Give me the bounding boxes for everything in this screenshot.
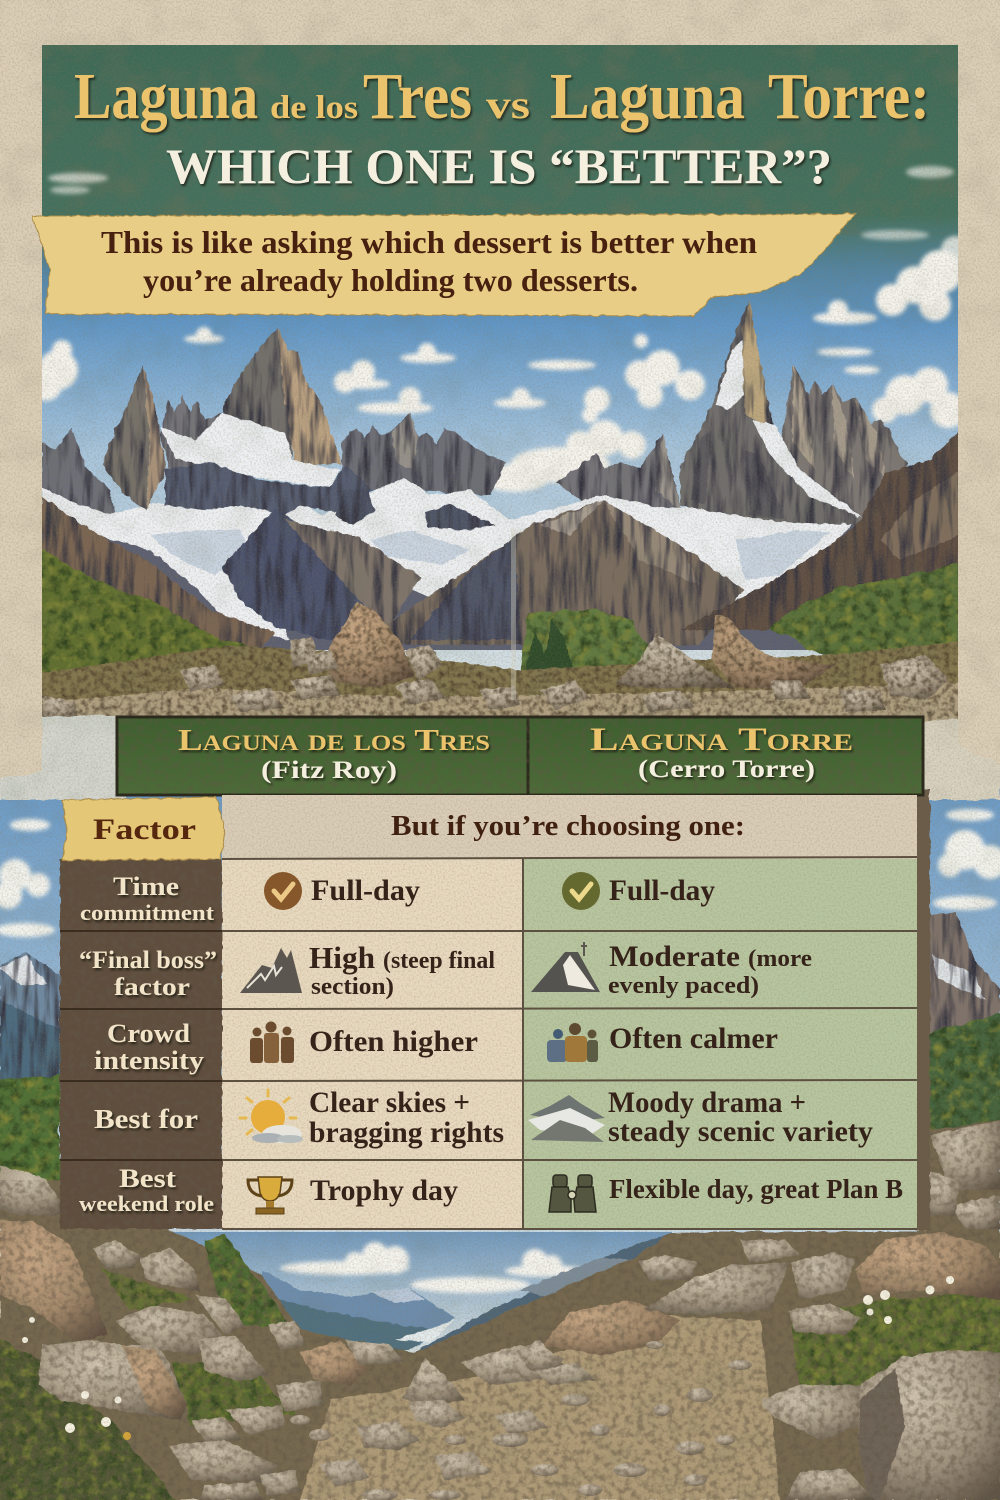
Fitz Roy lit face xyxy=(278,327,342,464)
value: bragging rights xyxy=(309,1116,504,1149)
label: “Final boss” xyxy=(79,947,217,974)
label xyxy=(94,1019,204,1075)
right small peak xyxy=(556,434,680,508)
header right text xyxy=(590,722,853,783)
cell backgrounds xyxy=(222,795,917,1229)
Cerro Torre snow xyxy=(716,340,862,517)
header right text: Laguna Torre xyxy=(590,722,853,758)
right stone edge xyxy=(915,790,930,1230)
header left xyxy=(117,717,528,795)
bottom sky window xyxy=(172,1232,672,1357)
row: crowd intensity xyxy=(94,1019,778,1075)
row: best for xyxy=(94,1086,873,1149)
title: Torre: xyxy=(768,60,930,133)
valley peak shadow side xyxy=(222,508,386,640)
right boulder group xyxy=(615,633,735,688)
label: factor xyxy=(114,974,190,1001)
sky and green title band xyxy=(42,45,958,725)
right side spires xyxy=(770,363,908,525)
value: Full-day xyxy=(609,874,715,907)
value: (more xyxy=(748,946,812,972)
row: final boss factor xyxy=(79,940,812,1001)
outcrops in snow xyxy=(335,488,375,525)
value: Moderate xyxy=(609,940,740,973)
rock base below the snow line xyxy=(42,524,952,650)
value: section) xyxy=(311,974,394,1000)
icon: green check xyxy=(562,872,600,910)
label xyxy=(79,1164,214,1216)
stone texture xyxy=(60,859,222,1229)
title: de los xyxy=(270,90,358,126)
title: Laguna xyxy=(550,60,745,133)
icon: brown check xyxy=(264,872,302,910)
lower landscape backdrop xyxy=(0,716,1000,1500)
value: evenly paced) xyxy=(608,973,759,999)
dark band under snow xyxy=(165,462,372,515)
header left text: Laguna de los Tres xyxy=(178,722,490,757)
value: Full-day xyxy=(311,874,420,907)
label xyxy=(79,947,217,1001)
value xyxy=(309,940,495,1000)
title xyxy=(74,60,930,133)
banner text: This is like asking which dessert is better when xyxy=(101,224,757,260)
rocky ground base xyxy=(0,1120,1000,1500)
near rock formations xyxy=(42,300,960,650)
header texture xyxy=(118,718,922,794)
banner: you’re already holding two desserts. xyxy=(143,262,638,298)
Cerro Torre lit face xyxy=(742,300,770,428)
vegetation xyxy=(30,543,970,705)
title: Tres xyxy=(363,60,472,133)
prompt text: But if you’re choosing one: xyxy=(391,811,745,842)
title band mottling xyxy=(42,45,958,235)
seam between the two scenes xyxy=(511,530,516,700)
central far jagged ridge xyxy=(342,412,506,495)
dark right ridge xyxy=(680,430,960,630)
vegetation patches xyxy=(0,1234,1000,1500)
icon: misty mountains xyxy=(528,1095,605,1142)
value: Flexible day, great Plan B xyxy=(609,1174,903,1204)
value: Often calmer xyxy=(609,1022,778,1055)
rock surface texture xyxy=(0,1120,1000,1500)
left needle lit side xyxy=(143,365,166,510)
label: weekend role xyxy=(79,1191,214,1216)
upper clouds xyxy=(30,166,969,492)
side foliage xyxy=(0,1010,1000,1190)
value: Trophy day xyxy=(310,1174,458,1207)
value xyxy=(309,1086,504,1149)
header left text: (Fitz Roy) xyxy=(261,757,397,784)
valley peak sunlit side xyxy=(285,520,421,630)
foreground ground xyxy=(30,640,970,730)
foreground rocks xyxy=(0,1120,1000,1500)
central boulder xyxy=(327,602,415,688)
value: Often higher xyxy=(309,1025,478,1058)
header right xyxy=(528,717,923,795)
value: Clear skies + xyxy=(309,1086,470,1119)
subtitle: WHICH ONE IS “BETTER”? xyxy=(166,138,832,194)
value: steady scenic variety xyxy=(608,1115,873,1148)
Cerro Torre shadow ribs xyxy=(690,430,712,505)
label: Crowd xyxy=(107,1019,191,1048)
far left peak xyxy=(42,428,116,514)
column headers xyxy=(117,717,923,795)
cell texture xyxy=(222,795,917,1229)
header left text xyxy=(178,722,490,784)
lower sky xyxy=(0,785,1000,1235)
Cerro Torre main tower xyxy=(680,300,862,525)
factor tab xyxy=(62,797,225,860)
side mountains xyxy=(0,912,1000,1090)
icon: binoculars xyxy=(549,1175,596,1212)
banner ribbon xyxy=(32,214,855,316)
mist and parchment fade beside table xyxy=(0,716,125,800)
bottom clouds xyxy=(280,1242,585,1293)
conifer trees xyxy=(522,618,578,685)
label: Time xyxy=(113,872,179,901)
header right text: (Cerro Torre) xyxy=(638,756,815,783)
icon: mountain with flag xyxy=(531,942,600,992)
label: intensity xyxy=(94,1046,204,1075)
distant rock massifs xyxy=(42,327,908,530)
icon: trophy xyxy=(248,1177,292,1214)
factor tab text: Factor xyxy=(93,813,196,846)
gravel stones xyxy=(290,1341,752,1500)
label: commitment xyxy=(80,900,215,925)
label xyxy=(80,872,215,925)
value: (steep final xyxy=(383,948,495,974)
small spires by Fitz Roy xyxy=(160,395,222,469)
title: vs xyxy=(486,82,530,127)
snow shadows xyxy=(150,530,830,580)
label: Best for xyxy=(94,1104,198,1134)
Fitz Roy snow xyxy=(160,413,340,488)
icon: hikers brown xyxy=(250,1022,294,1063)
Fitz Roy dark face xyxy=(222,327,292,462)
icon: steep mountain xyxy=(240,948,302,993)
row: time commitment xyxy=(80,872,715,925)
value xyxy=(608,1086,873,1148)
label: Best xyxy=(119,1164,176,1193)
factor tab shape xyxy=(62,797,225,860)
title: Laguna xyxy=(74,60,258,133)
trail xyxy=(300,1315,780,1500)
distant valley mountains xyxy=(262,1235,680,1352)
upper landscape panel xyxy=(30,45,970,730)
value xyxy=(608,940,812,999)
icon: hikers coloured xyxy=(547,1023,598,1062)
left slope xyxy=(42,497,275,650)
foreground rocks xyxy=(42,602,950,722)
icon: sun and cloud xyxy=(240,1090,303,1143)
wildflowers xyxy=(22,1276,954,1440)
row and column rules xyxy=(60,857,917,1229)
lower side clouds xyxy=(0,809,1000,937)
left needle dark side xyxy=(102,365,150,510)
stone label column xyxy=(60,859,222,1229)
value: High xyxy=(309,940,375,975)
value: Moody drama + xyxy=(608,1086,806,1119)
banner xyxy=(32,214,855,316)
row: best weekend role xyxy=(79,1164,903,1216)
comparison table xyxy=(60,717,930,1230)
main snowfield xyxy=(42,477,860,640)
central brown mountain xyxy=(386,500,744,645)
